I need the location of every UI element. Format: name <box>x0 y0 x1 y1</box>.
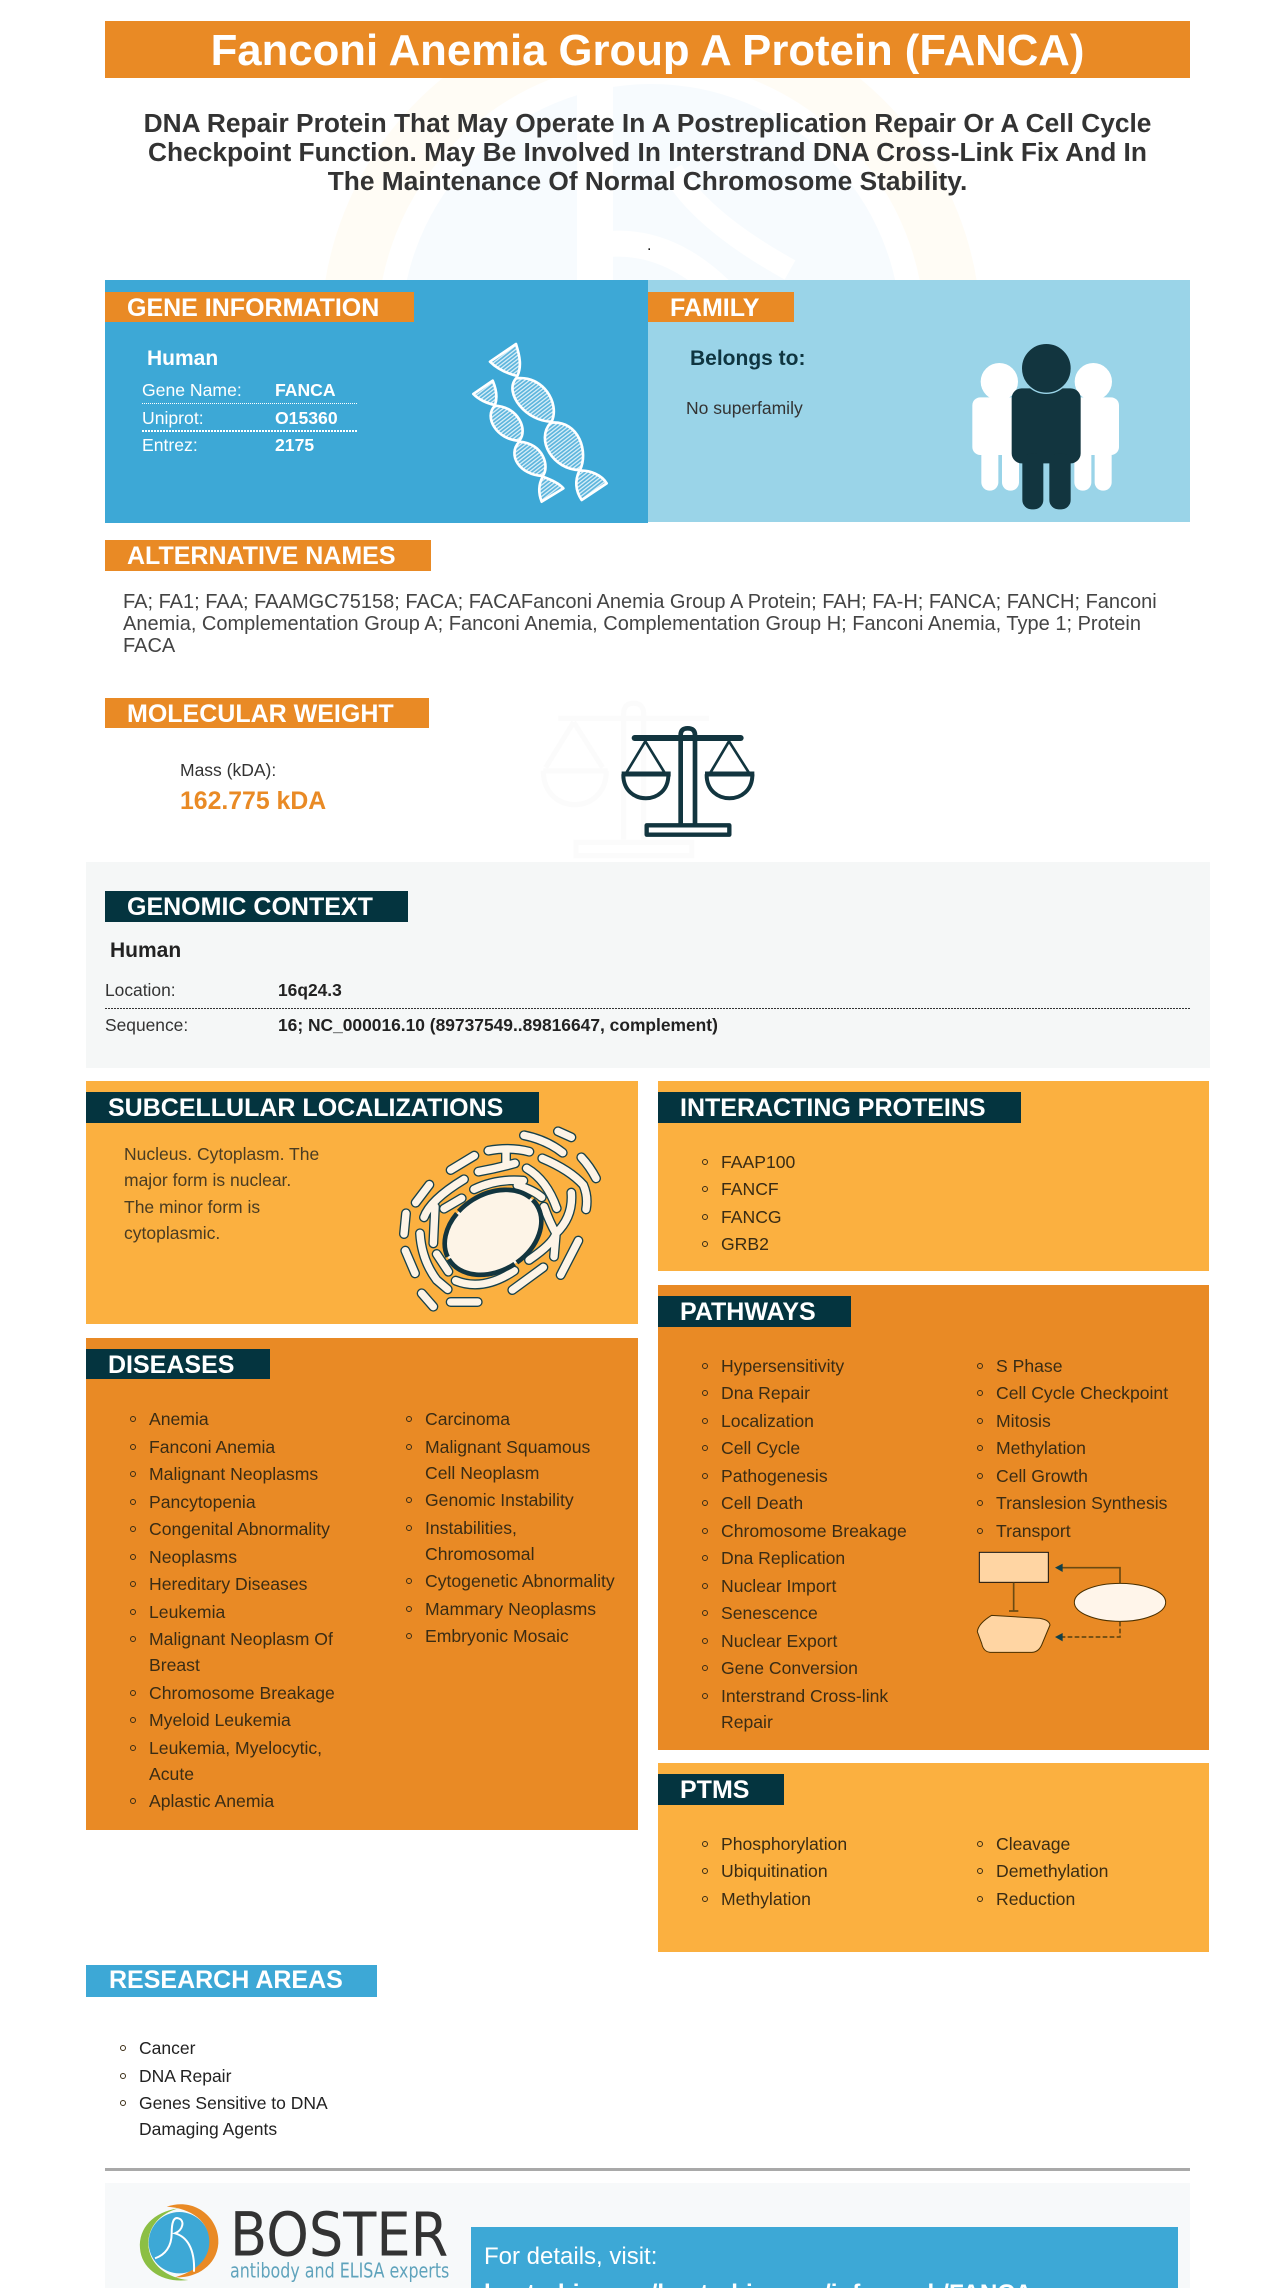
pathways list column 1 <box>702 1356 907 1732</box>
subtitle: DNA Repair Protein That May Operate In A Postreplication Repair Or A Cell Cycle <box>144 108 1151 138</box>
heading: subcellular localizations: SUBCELLULAR LOCALIZATIONS <box>108 1094 503 1122</box>
heading: alternative names: ALTERNATIVE NAMES <box>127 542 396 570</box>
diseases list column 1: Acute <box>149 1764 194 1784</box>
pathways list column 1: Hypersensitivity <box>721 1356 844 1376</box>
logo: boster <box>140 2200 449 2282</box>
ptms list column 1 <box>702 1834 847 1908</box>
species label: Human <box>110 939 181 962</box>
heading: diseases: DISEASES <box>108 1351 234 1379</box>
sequence row: Sequence: <box>105 1015 188 1035</box>
diseases list column 2: Embryonic Mosaic <box>425 1626 569 1646</box>
pathways list column 2: S Phase <box>996 1356 1063 1376</box>
pathways list column 2 <box>977 1356 1168 1540</box>
mass value: 162.775 kDA <box>180 788 326 815</box>
icon: people <box>972 344 1119 510</box>
subtitle: The Maintenance Of Normal Chromosome Stability. <box>328 166 967 196</box>
pathways list column 1: Nuclear Import <box>721 1576 836 1596</box>
title <box>105 21 1190 78</box>
research areas list <box>120 2038 328 2139</box>
gene name row: Gene Name: <box>142 380 242 400</box>
diseases list column 1: Malignant Neoplasms <box>149 1464 318 1484</box>
diseases list column 2 <box>406 1409 615 1646</box>
alternative names text: FA; FA1; FAA; FAAMGC75158; FACA; FACAFanconi Anemia Group A Protein; FAH; FA-H; FANCA; FANCH; Fanconi <box>123 591 1157 613</box>
interacting proteins list: FAAP100 <box>721 1152 795 1172</box>
pathways list column 2: Methylation <box>996 1438 1086 1458</box>
panel: genomic context <box>86 862 1210 1068</box>
entrez row: 2175 <box>275 435 314 455</box>
mass label: Mass (kDA): <box>180 760 276 780</box>
heading: family <box>648 292 794 322</box>
localization text: The minor form is <box>124 1197 260 1217</box>
panel: subcellular localizations <box>86 1081 638 1324</box>
diseases list column 2: Mammary Neoplasms <box>425 1599 596 1619</box>
species label: Human <box>147 347 218 370</box>
pathways list column 2: Mitosis <box>996 1410 1051 1430</box>
uniprot row <box>142 406 357 432</box>
pathways list column 1: Dna Repair <box>721 1383 810 1403</box>
pathways list column 1: Cell Cycle <box>721 1438 800 1458</box>
heading: genomic context: GENOMIC CONTEXT <box>127 893 373 921</box>
callout: details link <box>471 2227 1178 2288</box>
panel: family <box>648 280 1190 522</box>
pathways list column 1: Repair <box>721 1712 773 1732</box>
heading: gene information: GENE INFORMATION <box>127 294 379 322</box>
diseases list column 1: Leukemia, Myelocytic, <box>149 1738 322 1758</box>
entrez row: Entrez: <box>142 435 198 455</box>
diseases list column 2: Chromosomal <box>425 1544 535 1564</box>
ptms list column 2: Reduction <box>996 1888 1075 1908</box>
diseases list column 1: Neoplasms <box>149 1546 237 1566</box>
pathways list column 2: Cell Growth <box>996 1466 1088 1486</box>
pathways list column 1: Interstrand Cross-link <box>721 1686 888 1706</box>
panel: interacting proteins <box>658 1081 1209 1271</box>
icon: scale <box>621 726 754 837</box>
small dot: . <box>647 237 651 254</box>
subtitle: Checkpoint Function. May Be Involved In Interstrand DNA Cross-Link Fix And In <box>148 137 1147 167</box>
pathways list column 1: Cell Death <box>721 1493 803 1513</box>
gene name row <box>142 378 357 404</box>
diseases list column 1: Myeloid Leukemia <box>149 1710 291 1730</box>
panel: pathways <box>658 1285 1209 1750</box>
research areas list: Genes Sensitive to DNA <box>139 2093 328 2113</box>
location row: 16q24.3 <box>278 980 342 1000</box>
panel: gene information <box>105 280 648 523</box>
heading: diseases <box>86 1349 270 1379</box>
location row: Location: <box>105 980 176 1000</box>
pathways list column 2: Cell Cycle Checkpoint <box>996 1383 1168 1403</box>
pathways list column 2: Translesion Synthesis <box>996 1493 1167 1513</box>
heading: pathways: PATHWAYS <box>680 1298 816 1326</box>
research areas list: Cancer <box>139 2038 195 2058</box>
background watermark logo <box>326 78 976 280</box>
heading: ptms: PTMS <box>680 1776 749 1804</box>
ptms list column 2: Demethylation <box>996 1861 1108 1881</box>
diseases list column 1: Pancytopenia <box>149 1492 256 1512</box>
panel: diseases <box>86 1338 638 1830</box>
interacting proteins list: GRB2 <box>721 1234 769 1254</box>
localization text: major form is nuclear. <box>124 1170 291 1190</box>
subtitle <box>144 108 1151 196</box>
icon: dna <box>472 342 608 504</box>
callout: details link: For details, visit: <box>484 2243 657 2270</box>
localization text: Nucleus. Cytoplasm. The <box>124 1144 319 1164</box>
pathways list column 1: Senescence <box>721 1603 818 1623</box>
icon: cell organelles <box>399 1126 601 1312</box>
sequence row: 16; NC_000016.10 (89737549..89816647, complement) <box>278 1015 718 1035</box>
pathways list column 1: Chromosome Breakage <box>721 1520 907 1540</box>
alternative names text <box>123 591 1157 657</box>
diseases list column 1: Fanconi Anemia <box>149 1436 275 1456</box>
interacting proteins list: FANCF <box>721 1179 779 1199</box>
heading: family: FAMILY <box>670 294 759 322</box>
logo: boster: BOSTER <box>230 2200 448 2270</box>
diseases list column 1: Malignant Neoplasm Of <box>149 1629 333 1649</box>
footer divider <box>105 2168 1190 2171</box>
belongs to label: Belongs to: <box>690 347 806 370</box>
diseases list column 2: Cell Neoplasm <box>425 1463 539 1483</box>
icon: pathway diagram <box>976 1552 1166 1653</box>
diseases list column 2: Instabilities, <box>425 1518 517 1538</box>
family text: No superfamily <box>686 398 803 418</box>
diseases list column 1: Leukemia <box>149 1602 225 1622</box>
ptms list column 1: Ubiquitination <box>721 1861 828 1881</box>
diseases list column 1: Congenital Abnormality <box>149 1519 330 1539</box>
uniprot row: O15360 <box>275 408 338 428</box>
heading: ptms <box>658 1774 784 1805</box>
heading: molecular weight: MOLECULAR WEIGHT <box>127 700 394 728</box>
heading: research areas: RESEARCH AREAS <box>109 1966 343 1994</box>
alternative names text: Anemia, Complementation Group A; Fanconi Anemia, Complementation Group H; Fanconi Anemia, Type 1; Protein <box>123 613 1141 635</box>
diseases list column 1: Aplastic Anemia <box>149 1791 274 1811</box>
ptms list column 1: Phosphorylation <box>721 1834 847 1854</box>
interacting proteins list: FANCG <box>721 1206 782 1226</box>
localization text: cytoplasmic. <box>124 1223 220 1243</box>
ptms list column 2 <box>977 1834 1108 1908</box>
diseases list column 1: Hereditary Diseases <box>149 1574 307 1594</box>
pathways list column 1: Localization <box>721 1410 814 1430</box>
location row <box>105 978 1190 1009</box>
ptms list column 1: Methylation <box>721 1888 811 1908</box>
entrez row <box>142 435 314 455</box>
diseases list column 2: Cytogenetic Abnormality <box>425 1571 615 1591</box>
pathways list column 1: Dna Replication <box>721 1548 845 1568</box>
diseases list column 1: Chromosome Breakage <box>149 1683 335 1703</box>
interacting proteins list <box>702 1152 795 1254</box>
diseases list column 2: Genomic Instability <box>425 1490 574 1510</box>
pathways list column 1: Pathogenesis <box>721 1466 828 1486</box>
alternative names text: FACA <box>123 635 175 657</box>
diseases list column 2: Carcinoma <box>425 1409 510 1429</box>
diseases list column 1: Breast <box>149 1655 200 1675</box>
heading: interacting proteins: INTERACTING PROTEINS <box>680 1094 986 1122</box>
panel: ptms <box>658 1763 1209 1952</box>
diseases list column 2: Malignant Squamous <box>425 1436 590 1456</box>
gene name row: FANCA <box>275 380 336 400</box>
uniprot row: Uniprot: <box>142 408 204 428</box>
pathways list column 1: Gene Conversion <box>721 1658 858 1678</box>
heading: pathways <box>658 1296 851 1327</box>
panel: footer <box>105 2183 1190 2288</box>
title: Fanconi Anemia Group A Protein (FANCA) <box>211 26 1084 75</box>
icon: faint scale watermark <box>500 680 800 862</box>
diseases list column 1: Anemia <box>149 1409 209 1429</box>
pathways list column 2: Transport <box>996 1520 1071 1540</box>
localization text <box>124 1144 319 1243</box>
ptms list column 2: Cleavage <box>996 1834 1070 1854</box>
diseases list column 1 <box>130 1409 335 1811</box>
pathways list column 1: Nuclear Export <box>721 1630 837 1650</box>
research areas list: DNA Repair <box>139 2066 231 2086</box>
research areas list: Damaging Agents <box>139 2119 277 2139</box>
